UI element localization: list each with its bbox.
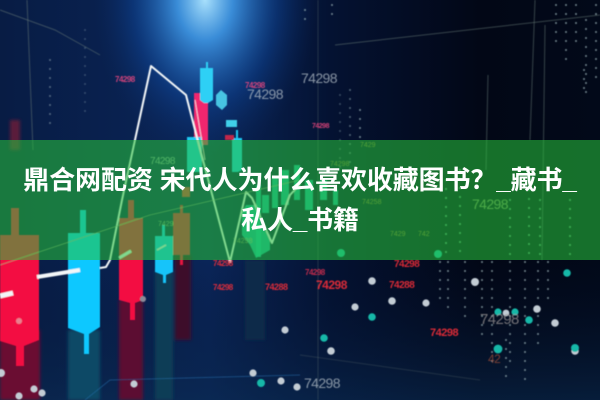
- white price line: [0, 66, 300, 296]
- olive labels inside band: 74298: [330, 161, 350, 168]
- gray price labels: 74298: [247, 86, 284, 102]
- red price labels: 74298: [316, 278, 348, 292]
- teal data dots: [257, 249, 579, 387]
- red price labels: 74288: [389, 280, 415, 291]
- red price labels: 74298: [430, 327, 458, 339]
- candlestick: large cyan: [68, 210, 100, 354]
- title: 鼎合网配资 宋代人为什么喜欢收藏图书？_藏书_: [23, 165, 577, 195]
- olive labels inside band: 7429: [390, 231, 406, 238]
- gray price labels: 74298: [472, 196, 509, 212]
- olive labels inside band: 742: [418, 231, 430, 238]
- red price labels: [115, 75, 458, 339]
- red price labels: 74298: [312, 123, 330, 130]
- red price labels: 74298: [245, 81, 266, 90]
- gray data dots: [0, 277, 579, 400]
- gray price labels: 42: [488, 352, 501, 366]
- gray price labels: 74298: [150, 156, 176, 167]
- candlestick: medium red: [119, 200, 143, 320]
- gray price labels: 74298: [304, 375, 341, 391]
- olive labels inside band: 7429: [158, 221, 174, 228]
- red price labels: 74298: [394, 259, 420, 270]
- olive labels inside band: [158, 142, 430, 245]
- red price labels: 74298: [305, 268, 326, 277]
- candlestick: small red: [173, 205, 190, 265]
- gray price labels: 74298: [480, 311, 519, 328]
- olive labels inside band: 7429: [360, 142, 376, 149]
- green title band: [0, 140, 600, 260]
- gray price labels: [150, 70, 519, 391]
- red price labels: 74288: [265, 282, 288, 292]
- candlestick: small cyan: [155, 225, 173, 283]
- title: 私人_书籍: [241, 205, 359, 235]
- title: [23, 165, 578, 235]
- olive labels inside band: 74298: [233, 238, 253, 245]
- upper candlesticks cluster: [182, 62, 242, 197]
- red price labels: 74298: [213, 283, 234, 292]
- red price labels: 74298: [115, 75, 136, 84]
- red price labels: 74298: [213, 259, 234, 268]
- mid-band small candlesticks: [242, 165, 338, 258]
- olive labels inside band: 74258: [362, 199, 382, 206]
- candlestick: large red: [0, 208, 39, 366]
- gray price labels: 74298: [301, 70, 338, 86]
